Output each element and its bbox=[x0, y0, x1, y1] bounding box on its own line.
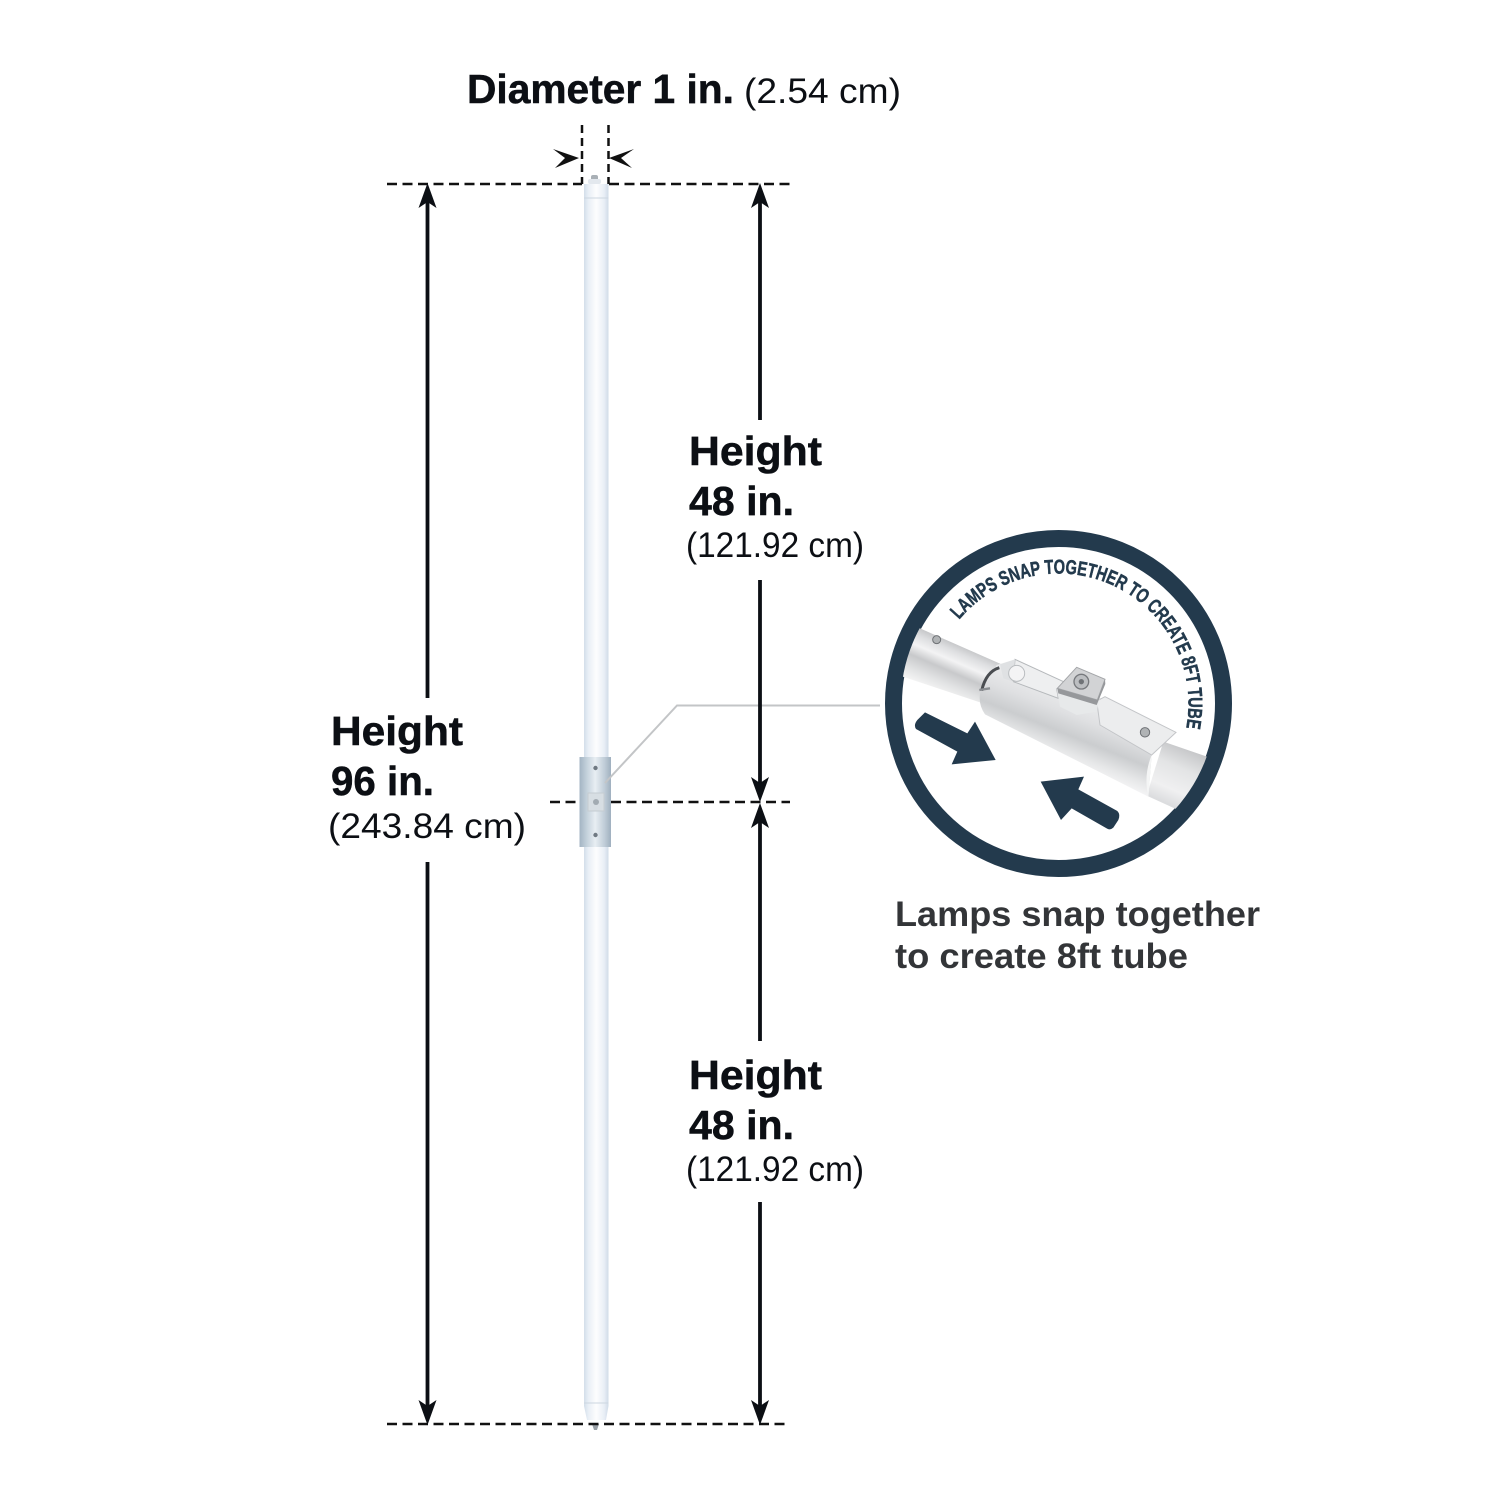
label: height 96 in bbox=[328, 708, 526, 846]
label: lower height 48 in bbox=[686, 1052, 864, 1189]
leader line to callout bbox=[605, 706, 880, 783]
label: height 96 in: Height bbox=[331, 708, 463, 754]
dashed reference lines bbox=[387, 184, 790, 1424]
callout caption: to create 8ft tube bbox=[895, 937, 1188, 976]
dimension arrow: lower 48 in bbox=[751, 803, 769, 1425]
callout: snap connection detail bbox=[885, 530, 1232, 877]
label: lower height 48 in: 48 in. bbox=[689, 1102, 794, 1148]
diameter dimension guides and arrows bbox=[553, 125, 634, 184]
label: height 96 in: 96 in. bbox=[331, 758, 434, 804]
label: upper height 48 in: Height bbox=[689, 428, 822, 474]
press arrow left bbox=[915, 712, 996, 764]
label: upper height 48 in: 48 in. bbox=[689, 478, 794, 524]
diameter label: Diameter 1 in. bbox=[467, 66, 734, 112]
press arrow right bbox=[1041, 777, 1119, 829]
label: upper height 48 in: (121.92 cm) bbox=[686, 526, 864, 565]
callout ring bbox=[894, 538, 1224, 868]
dimension arrow: upper 48 in bbox=[751, 183, 769, 802]
connector sleeve on tube bbox=[580, 757, 611, 847]
diameter label: (2.54 cm) bbox=[744, 72, 901, 111]
label: height 96 in: (243.84 cm) bbox=[328, 807, 526, 846]
diameter label bbox=[467, 66, 901, 112]
callout caption bbox=[895, 895, 1260, 976]
lamp joint close-up bbox=[900, 628, 1217, 829]
dimension arrow: 96 in bbox=[418, 183, 436, 1425]
label: lower height 48 in: (121.92 cm) bbox=[686, 1150, 864, 1189]
tube: 8ft lamp bbox=[584, 175, 608, 1430]
curved callout text: LAMPS SNAP TOGETHER TO CREATE 8FT TUBE bbox=[949, 559, 1203, 730]
label: upper height 48 in bbox=[686, 428, 864, 565]
callout caption: Lamps snap together bbox=[895, 895, 1260, 934]
label: lower height 48 in: Height bbox=[689, 1052, 822, 1098]
